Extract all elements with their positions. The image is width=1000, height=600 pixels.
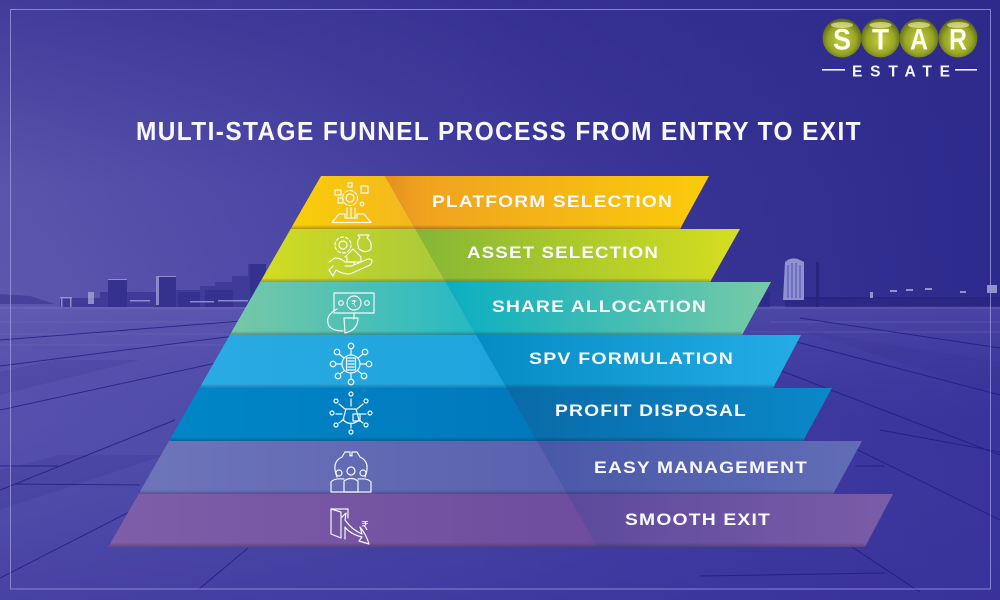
stage 3: share allocation: ₹ (351, 298, 357, 308)
stage 7: smooth exit: SMOOTH EXIT (625, 511, 771, 529)
stage 1: platform selection: PLATFORM SELECTION (432, 193, 673, 211)
stage 3: share allocation: SHARE ALLOCATION (492, 298, 707, 316)
logo: Star Estate: A (910, 24, 928, 56)
stage 4: spv formulation: SPV FORMULATION (529, 350, 734, 368)
stage 6: easy management: EASY MANAGEMENT (594, 459, 808, 477)
funnel (108, 176, 893, 547)
title: MULTI-STAGE FUNNEL PROCESS FROM ENTRY TO EXIT (136, 116, 862, 146)
logo: Star Estate: ESTATE (852, 64, 950, 80)
stage 6: easy management (139, 441, 862, 494)
stage 7: smooth exit: ₹ (361, 519, 369, 533)
logo: Star Estate: R (949, 24, 967, 56)
stage 1: platform selection (291, 176, 709, 229)
stage 2: asset selection: ASSET SELECTION (467, 244, 659, 262)
stage 3: share allocation (230, 282, 771, 335)
logo: Star Estate: T (872, 24, 889, 56)
stage 2: asset selection (260, 229, 740, 282)
stage 7: smooth exit (108, 494, 893, 547)
stage 4: spv formulation (199, 335, 801, 388)
logo: Star Estate: S (833, 24, 851, 56)
stage 5: profit disposal: PROFIT DISPOSAL (555, 402, 747, 420)
stage 5: profit disposal (169, 388, 832, 441)
logo: Star Estate (822, 18, 978, 80)
